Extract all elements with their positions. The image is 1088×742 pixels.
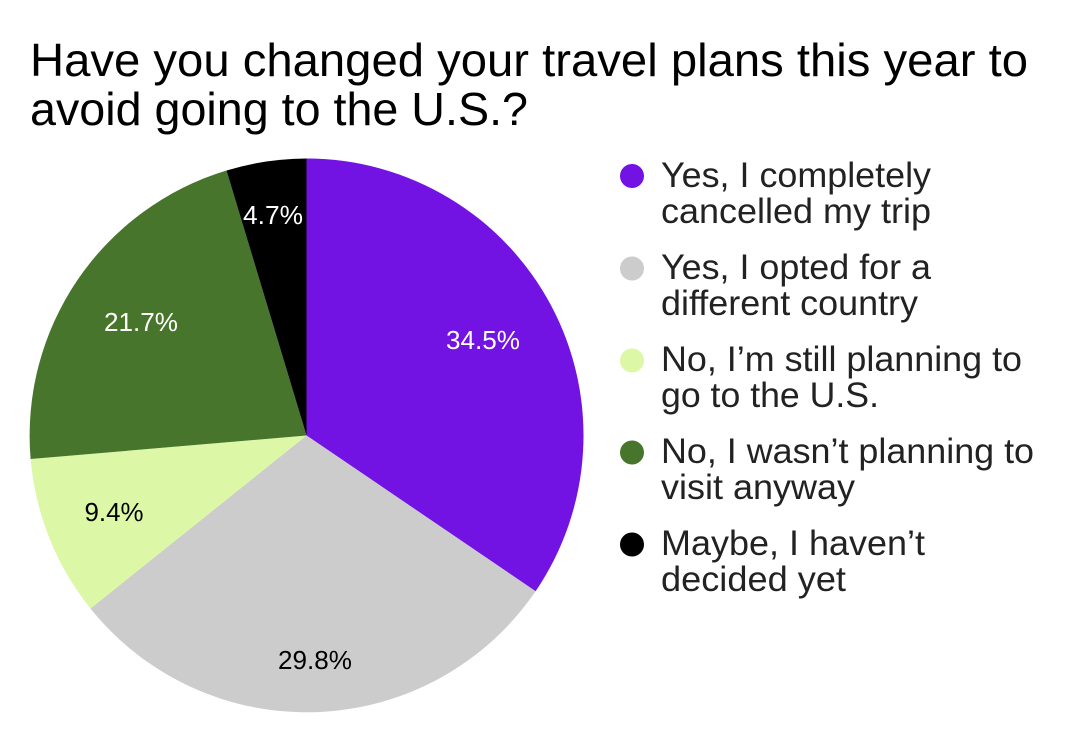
legend item: maybe xyxy=(620,524,925,599)
pie chart xyxy=(30,158,584,712)
value labels xyxy=(84,200,520,675)
slice: no, wasn't planning 21.7% xyxy=(30,170,306,459)
legend item: yes, completely cancelled xyxy=(620,156,932,231)
legend item: no, still planning: go to the U.S. xyxy=(661,376,879,415)
legend item: no, still planning: No, I’m still planning to xyxy=(661,340,1022,379)
legend item: yes, completely cancelled: Yes, I completely xyxy=(661,156,932,195)
title: Have you changed your travel plans this year to xyxy=(30,34,1028,86)
value labels: 29.8% xyxy=(278,645,352,675)
value labels: 9.4% xyxy=(84,497,144,527)
title xyxy=(30,34,1028,135)
value labels: 4.7% xyxy=(243,200,303,230)
legend item: yes, different country xyxy=(620,248,932,323)
legend item: no, wasn't planning xyxy=(620,432,1034,507)
slice: yes, completely cancelled 34.5% xyxy=(306,158,584,591)
legend item: yes, different country: Yes, I opted for a xyxy=(661,248,932,287)
legend xyxy=(620,156,1034,599)
legend item: yes, different country: different country xyxy=(661,284,919,323)
slice: no, still planning 9.4% xyxy=(31,436,306,608)
value labels: 21.7% xyxy=(104,307,178,337)
legend item: maybe: decided yet xyxy=(661,560,846,599)
legend item: no, wasn't planning: No, I wasn’t planning to xyxy=(661,432,1034,471)
legend item: yes, completely cancelled: cancelled my trip xyxy=(661,192,931,231)
legend item: no, wasn't planning: visit anyway xyxy=(661,468,856,507)
slice: maybe 4.7% xyxy=(226,158,306,436)
legend item: maybe: Maybe, I haven’t xyxy=(661,524,925,563)
slice: yes, different country 29.8% xyxy=(90,436,536,712)
value labels: 34.5% xyxy=(446,325,520,355)
title: avoid going to the U.S.? xyxy=(30,83,528,135)
legend item: no, still planning xyxy=(620,340,1022,415)
